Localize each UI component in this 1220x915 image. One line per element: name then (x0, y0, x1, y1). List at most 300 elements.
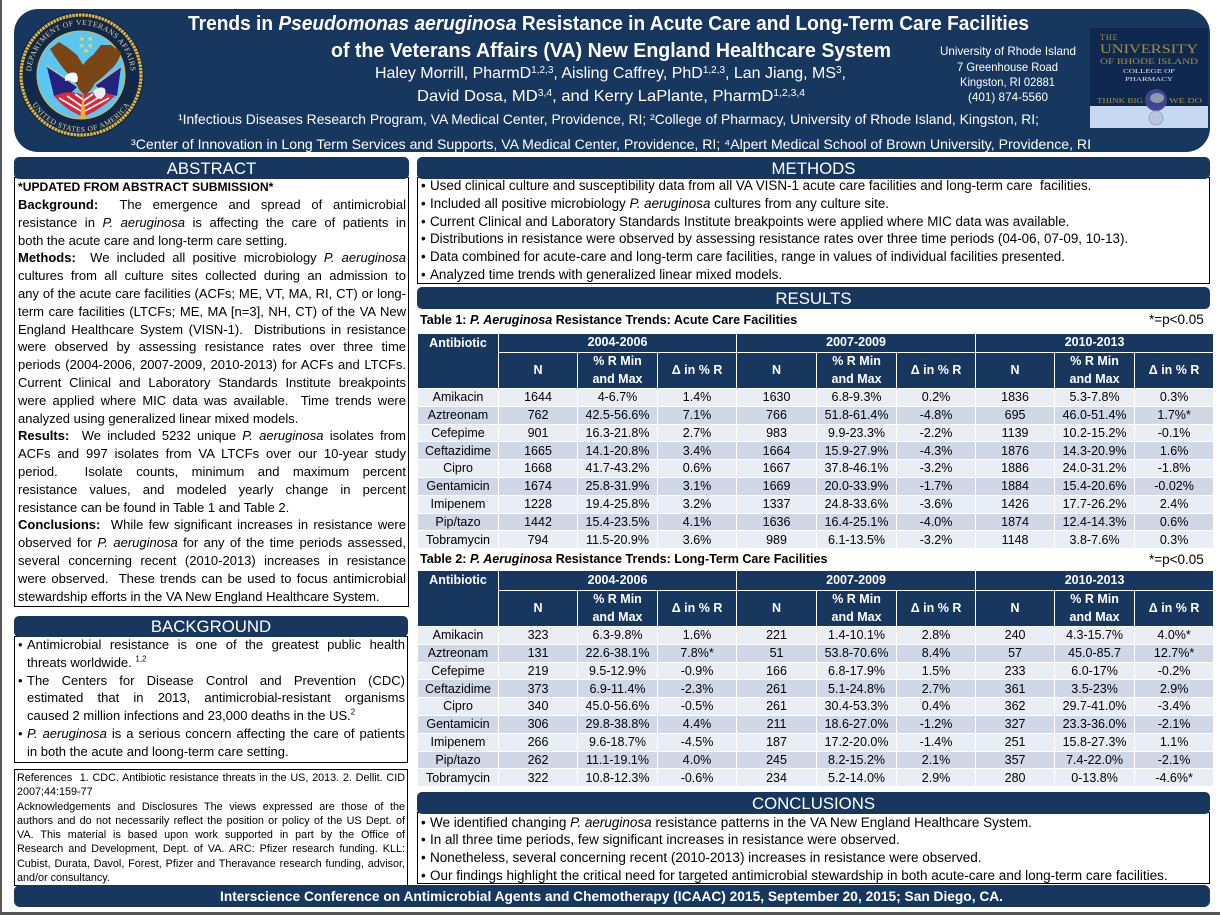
table 2: long-term care facilities: 4.4% (683, 717, 711, 731)
table 2: long-term care facilities: 306 (528, 717, 548, 731)
abstract text: cultures from all culture sites collected during an admission to (18, 268, 406, 283)
table 2: long-term care facilities: 1.6% (683, 628, 711, 642)
panel: abstract (14, 157, 409, 607)
references text: Research and Development, Dept. of VA. ARC: Pfizer research funding. KLL: (17, 843, 405, 855)
table 2: long-term care facilities: 323 (528, 628, 548, 642)
background bullets: in both the acute and loong-term care setting. (27, 744, 289, 759)
abstract text: England Healthcare System (VISN-1). Distributions in resistance (18, 322, 406, 337)
title and authors: 3 (836, 65, 842, 76)
heading: results (417, 287, 1210, 309)
table 1: acute care facilities: 1148 (1002, 533, 1028, 547)
table 2: long-term care facilities: -2.1% (1158, 717, 1190, 731)
table 1: acute care facilities: 1644 (524, 390, 552, 404)
table 1: acute care facilities: Tobramycin (426, 533, 490, 547)
table 1: acute care facilities: -3.6% (920, 497, 952, 511)
table 2: long-term care facilities: 266 (528, 735, 548, 749)
table 1: acute care facilities: 2004-2006 (588, 335, 647, 349)
table 1: acute care facilities: Pip/tazo (435, 515, 481, 529)
table 2: long-term care facilities: 240 (1005, 628, 1025, 642)
methods bullets: Current Clinical and Laboratory Standards Institute breakpoints were applied where MIC data was available. (430, 214, 1069, 229)
table 2: long-term care facilities: 219 (528, 664, 548, 678)
table 1: acute care facilities: 1669 (763, 479, 790, 493)
table 2: long-term care facilities: N (772, 601, 781, 615)
table 1: acute care facilities: 0.3% (1160, 390, 1188, 404)
table 1: acute care facilities: 6.1-13.5% (828, 533, 885, 547)
table 1: acute care facilities: 37.8-46.1% (825, 461, 888, 475)
background bullets: estimated that in 2013, antimicrobial-resistant organisms (27, 690, 405, 705)
table 2: long-term care facilities: and Max (1070, 610, 1120, 624)
heading: conclusions (417, 792, 1210, 814)
table 2: long-term care facilities: Aztreonam (428, 646, 488, 660)
table 1: acute care facilities: 3.8-7.6% (1070, 533, 1120, 547)
table 2: long-term care facilities: 2.9% (1160, 682, 1188, 696)
table 1: acute care facilities: 4-6.7% (598, 390, 637, 404)
heading: conclusions: CONCLUSIONS (752, 794, 875, 813)
table 2: long-term care facilities: Ceftazidime (425, 682, 491, 696)
table 1: acute care facilities: 901 (528, 426, 548, 440)
table 2: long-term care facilities: 2.9% (922, 771, 950, 785)
table 2: long-term care facilities: 221 (766, 628, 787, 642)
title and authors: of the Veterans Affairs (VA) New England Healthcare System (331, 39, 891, 62)
table 1: acute care facilities: 20.0-33.9% (825, 479, 888, 493)
icon: Department of Veterans Affairs seal: DEPARTMENT OF VETERANS AFFAIRS (26, 20, 136, 72)
references text: 2007;44:159-77 (17, 786, 93, 798)
table 1: acute care facilities: 766 (766, 408, 787, 422)
table 2: long-term care facilities: -1.2% (920, 717, 952, 731)
table 2: long-term care facilities: 8.2-15.2% (828, 753, 885, 767)
heading: abstract: ABSTRACT (167, 159, 256, 178)
table 2: long-term care facilities: 373 (528, 682, 548, 696)
background bullets: caused 2 million infections and 23,000 deaths in the US.2 (27, 708, 355, 723)
table 2: long-term care facilities: -0.9% (681, 664, 713, 678)
table 1: acute care facilities: and Max (592, 372, 642, 386)
table 2: long-term care facilities: 57 (1008, 646, 1022, 660)
header banner (14, 9, 1210, 152)
table 1: acute care facilities: 1337 (763, 497, 790, 511)
table 1: acute care facilities: Aztreonam (428, 408, 488, 422)
heading: background (14, 616, 408, 637)
abstract text: resistance in P. aeruginosa is affecting the care of patients in (18, 215, 406, 230)
heading: abstract (14, 157, 409, 179)
abstract text: term care facilities (LTCFs; ME, MA [n=3], NH, CT) of the VA New (18, 304, 406, 319)
title and authors: 1,2,3,4 (773, 88, 805, 99)
title and authors: 7 Greenhouse Road (957, 60, 1058, 74)
title and authors: , Aisling Caffrey, PhD (553, 65, 703, 82)
table 1: acute care facilities: 794 (528, 533, 548, 547)
table 1: acute care facilities: -0.02% (1154, 479, 1194, 493)
table 1: acute care facilities: 42.5-56.6% (586, 408, 649, 422)
icon: Department of Veterans Affairs seal (18, 12, 144, 138)
table 2: long-term care facilities: 7.8%* (680, 646, 714, 660)
methods bullets: Distributions in resistance were observed by assessing resistance rates over three time periods (04-06, 07-09, 10-13). (430, 231, 1128, 246)
title and authors: 1,2,3 (703, 65, 725, 76)
table 1: acute care facilities: 1836 (1001, 390, 1029, 404)
table 1: acute care facilities: 989 (766, 533, 787, 547)
title and authors: David Dosa, MD (417, 88, 533, 105)
table 1: acute care facilities: 2.4% (1160, 497, 1188, 511)
table 2: long-term care facilities: 5.2-14.0% (828, 771, 885, 785)
table 2: long-term care facilities: 1.1% (1160, 735, 1188, 749)
table 2: long-term care facilities: 0.4% (922, 699, 950, 713)
table 1: acute care facilities: -0.1% (1158, 426, 1190, 440)
table 1: acute care facilities: -4.8% (920, 408, 952, 422)
table 2: long-term care facilities: 22.6-38.1% (586, 646, 649, 660)
title and authors: Kingston, RI 02881 (960, 75, 1055, 89)
table 2: long-term care facilities: 8.4% (922, 646, 950, 660)
table 2: long-term care facilities: 51 (770, 646, 783, 660)
methods bullets: Data combined for acute-care and long-term care facilities, range in values of individual facilities presented. (430, 249, 1065, 264)
significance note for table 2: *=p<0.05 (1149, 552, 1204, 567)
abstract text: periods (2004-2006, 2007-2009, 2010-2013) for ACFs and LTCFs. (18, 357, 406, 372)
conclusions body box (417, 812, 1210, 884)
references text: and/or consultancy. (17, 872, 110, 884)
table 1: acute care facilities: 1674 (524, 479, 552, 493)
icon: Department of Veterans Affairs seal: UNITED STATES OF AMERICA (33, 102, 130, 132)
abstract text (18, 197, 406, 604)
table 2: long-term care facilities: 233 (1005, 664, 1025, 678)
table 2: long-term care facilities: 245 (766, 753, 787, 767)
table 2: long-term care facilities: 9.6-18.7% (589, 735, 646, 749)
table 1: acute care facilities: Δ in % R (911, 363, 961, 377)
table 1: acute care facilities: 16.4-25.1% (825, 515, 888, 529)
icon: University of Rhode Island logo (1090, 28, 1208, 128)
panel: methods (417, 157, 1210, 284)
title and authors: , (842, 65, 846, 82)
table 1: acute care facilities: 695 (1005, 408, 1025, 422)
table 1: acute care facilities: 25.8-31.9% (586, 479, 649, 493)
table 2: long-term care facilities: 10.8-12.3% (586, 771, 649, 785)
abstract text: observed for P. aeruginosa for any of the time periods assessed, (18, 535, 406, 550)
table 1: acute care facilities: 14.1-20.8% (586, 444, 649, 458)
table 1: acute care facilities: -2.2% (920, 426, 952, 440)
table 1: acute care facilities: 46.0-51.4% (1063, 408, 1127, 422)
table 1: acute care facilities: 1664 (763, 444, 790, 458)
abstract text: were observed. These trends can be used to focus antimicrobial (18, 571, 406, 586)
table 1 caption: Table 1: P. Aeruginosa Resistance Trends: Acute Care Facilities (420, 313, 797, 327)
table 1: acute care facilities: 24.8-33.6% (825, 497, 888, 511)
abstract text: Conclusions: While few significant increases in resistance were (18, 517, 406, 532)
table 2: long-term care facilities: Imipenem (431, 735, 485, 749)
table 2: long-term care facilities: 15.8-27.3% (1063, 735, 1127, 749)
abstract text: resistance values, and modeled yearly change in percent (18, 482, 406, 497)
table 1: acute care facilities: 24.0-31.2% (1063, 461, 1127, 475)
abstract update notice: *UPDATED FROM ABSTRACT SUBMISSION* (18, 180, 273, 194)
table 2: long-term care facilities: 251 (1005, 735, 1025, 749)
table 1: acute care facilities: 4.1% (683, 515, 711, 529)
icon: Department of Veterans Affairs seal: ★ ★ (79, 42, 93, 50)
table 1: acute care facilities: 0.6% (1160, 515, 1188, 529)
table 2: long-term care facilities: 0-13.8% (1071, 771, 1118, 785)
table 2: long-term care facilities: 1.5% (922, 664, 950, 678)
abstract text: Current Clinical and Laboratory Standards Institute breakpoints (18, 375, 406, 390)
title and authors (131, 12, 1091, 152)
abstract text: any of the acute care facilities (ACFs; ME, VT, MA, RI, CT) or long- (18, 286, 406, 301)
abstract text: were applied where MIC data was available. Time trends were (18, 393, 406, 408)
table 2: long-term care facilities: 6.9-11.4% (589, 682, 646, 696)
table 1: acute care facilities: 3.1% (683, 479, 711, 493)
flags (47, 67, 77, 96)
conclusions bullets: In all three time periods, few significant increases in resistance were observed. (430, 832, 900, 847)
table 1: acute care facilities: 1665 (524, 444, 552, 458)
references text: Acknowledgements and Disclosures The views expressed are those of the (17, 801, 405, 813)
table 1: acute care facilities: 5.3-7.8% (1070, 390, 1120, 404)
table 1: acute care facilities: and Max (1070, 372, 1120, 386)
icon: University of Rhode Island logo: PHARMACY (1125, 77, 1174, 83)
table 2: long-term care facilities: -4.6%* (1155, 771, 1193, 785)
table 1: acute care facilities: N (1011, 363, 1020, 377)
table 2: long-term care facilities: Cipro (443, 699, 473, 713)
title and authors: , Lan Jiang, MS (725, 65, 836, 82)
background bullets: Antimicrobial resistance is one of the greatest public health (27, 637, 405, 652)
table 1: acute care facilities: 1.4% (683, 390, 711, 404)
icon: University of Rhode Island logo: OF RHODE ISLAND (1100, 57, 1198, 66)
table 2: long-term care facilities: 30.4-53.3% (825, 699, 888, 713)
table 2: long-term care facilities: 29.7-41.0% (1063, 699, 1127, 713)
table 1: acute care facilities: -1.8% (1158, 461, 1190, 475)
table 2: long-term care facilities: 6.8-17.9% (828, 664, 885, 678)
table 1: acute care facilities: 1886 (1001, 461, 1029, 475)
table 1: acute care facilities: 11.5-20.9% (586, 533, 649, 547)
table 1: acute care facilities: N (772, 363, 781, 377)
table 1: acute care facilities: Δ in % R (672, 363, 722, 377)
table 1: acute care facilities: N (533, 363, 543, 377)
abstract text: resistance can be found in Table 1 and Table 2. (18, 500, 289, 515)
table 1: acute care facilities: 16.3-21.8% (586, 426, 649, 440)
table 2: long-term care facilities: 362 (1005, 699, 1025, 713)
table 2: long-term care facilities: -4.5% (681, 735, 713, 749)
abstract text: Results: We included 5232 unique P. aeruginosa isolates from (18, 428, 406, 443)
abstract text: were observed by assessing resistance rates over three time (18, 339, 406, 354)
table 2: long-term care facilities: 5.1-24.8% (828, 682, 885, 696)
table 1: acute care facilities: 1884 (1001, 479, 1029, 493)
icon: University of Rhode Island logo: UNIVERSITY (1100, 41, 1199, 56)
stars: ★ ★ (79, 35, 93, 43)
table 2: long-term care facilities: and Max (592, 610, 642, 624)
table 1: acute care facilities: 15.9-27.9% (825, 444, 888, 458)
table 2: long-term care facilities: 261 (766, 682, 787, 696)
title and authors: Haley Morrill, PharmD (375, 65, 531, 82)
references text: authors and do not necessarily reflect the position or policy of the US Dept. of (17, 815, 405, 827)
table 2: long-term care facilities: 187 (766, 735, 787, 749)
icon: University of Rhode Island logo: THINK BIG (1097, 97, 1143, 105)
table 1: acute care facilities: Amikacin (433, 390, 483, 404)
table 1: acute care facilities: 2007-2009 (826, 335, 886, 349)
table 2: long-term care facilities: and Max (832, 610, 882, 624)
heading: methods (417, 157, 1210, 179)
table 1: acute care facilities: -1.7% (920, 479, 952, 493)
references text: VA. This material is based upon work supported in part by the Office of (17, 829, 405, 841)
table 2: long-term care facilities: 261 (766, 699, 787, 713)
abstract text: Background: The emergence and spread of antimicrobial (18, 197, 406, 212)
table 1: acute care facilities: 6.8-9.3% (832, 390, 882, 404)
table 2: long-term care facilities: Pip/tazo (435, 753, 481, 767)
table 2: long-term care facilities: 7.4-22.0% (1066, 753, 1123, 767)
abstract text: Methods: We included all positive microbiology P. aeruginosa (18, 250, 406, 265)
table 2: long-term care facilities: 17.2-20.0% (825, 735, 888, 749)
table 2: long-term care facilities: Antibiotic (429, 573, 487, 587)
footer: conference banner (14, 885, 1210, 907)
table 2: long-term care facilities: 18.6-27.0% (825, 717, 888, 731)
table 1: acute care facilities: 1228 (524, 497, 552, 511)
table 2: long-term care facilities: -3.4% (1158, 699, 1190, 713)
table 2: long-term care facilities: 211 (767, 717, 786, 731)
abstract text: stewardship efforts in the VA New England Healthcare System. (18, 589, 380, 604)
title and authors: (401) 874-5560 (968, 90, 1048, 104)
table 2: long-term care facilities: 45.0-56.6% (586, 699, 649, 713)
references text: References 1. CDC. Antibiotic resistance threats in the US, 2013. 2. Dellit. CID (17, 772, 405, 784)
abstract text: analyzed using generalized linear mixed models. (18, 411, 298, 426)
methods bullets (422, 178, 1128, 282)
table 1: acute care facilities: 9.9-23.3% (828, 426, 885, 440)
table 1: acute care facilities: 15.4-23.5% (586, 515, 649, 529)
table 2: long-term care facilities: 361 (1005, 682, 1025, 696)
heading: methods: METHODS (772, 159, 855, 178)
table 2: long-term care facilities: % R Min (832, 592, 881, 606)
table 1: acute care facilities: 1668 (524, 461, 552, 475)
table 1: acute care facilities: 1442 (524, 515, 552, 529)
title and authors: , and Kerry LaPlante, PharmD (552, 88, 773, 105)
icon: University of Rhode Island logo: COLLEGE OF (1123, 69, 1176, 75)
background body box (14, 636, 408, 763)
table 1: acute care facilities: 10.2-15.2% (1063, 426, 1127, 440)
table 2: long-term care facilities: -2.3% (681, 682, 713, 696)
table 2: long-term care facilities: 327 (1005, 717, 1025, 731)
table 1: acute care facilities: 1874 (1001, 515, 1029, 529)
table 1: acute care facilities: and Max (832, 372, 882, 386)
table 1: acute care facilities: 15.4-20.6% (1063, 479, 1127, 493)
table 2: long-term care facilities: 4.0% (683, 753, 711, 767)
table 1: acute care facilities: 2.7% (683, 426, 711, 440)
table 2: long-term care facilities: 322 (528, 771, 548, 785)
icon: University of Rhode Island logo: THE (1100, 33, 1119, 42)
table 2: long-term care facilities: -1.4% (920, 735, 952, 749)
abstract text: several concerning recent (2010-2013) increases in resistance (18, 553, 406, 568)
title and authors: 3,4 (538, 88, 553, 99)
table 2: long-term care facilities: % R Min (593, 592, 642, 606)
table 2: long-term care facilities (418, 571, 1213, 786)
table 2: long-term care facilities: 4.0%* (1157, 628, 1191, 642)
table 2: long-term care facilities: 2.1% (922, 753, 950, 767)
table 1: acute care facilities: 0.3% (1160, 533, 1188, 547)
table 2: long-term care facilities: Tobramycin (426, 771, 490, 785)
table 1: acute care facilities: 14.3-20.9% (1063, 444, 1127, 458)
conclusions bullets: Nonetheless, several concerning recent (2010-2013) increases in resistance were observed. (430, 850, 982, 865)
eagle (50, 42, 121, 95)
title and authors: Trends in Pseudomonas aeruginosa Resistance in Acute Care and Long-Term Care Facilities (188, 12, 1029, 35)
table 1: acute care facilities: -4.0% (920, 515, 952, 529)
table 2: long-term care facilities: 9.5-12.9% (589, 664, 646, 678)
table 2: long-term care facilities: 12.7%* (1154, 646, 1194, 660)
table 2: long-term care facilities: 2004-2006 (588, 573, 647, 587)
table 2: long-term care facilities: 340 (528, 699, 548, 713)
table 1: acute care facilities: 3.4% (683, 444, 711, 458)
table 2: long-term care facilities: 29.8-38.8% (586, 717, 649, 731)
table 2: long-term care facilities: 4.3-15.7% (1066, 628, 1123, 642)
title and authors: 1,2,3 (531, 65, 554, 76)
abstract text: period. Isolate counts, minimum and maximum percent (18, 464, 406, 479)
table 2: long-term care facilities: 6.0-17% (1071, 664, 1118, 678)
icon: Department of Veterans Affairs seal: ★ (83, 47, 89, 55)
table 2: long-term care facilities: N (1011, 601, 1020, 615)
table 2: long-term care facilities: 234 (766, 771, 787, 785)
methods body box (417, 177, 1210, 284)
table 1: acute care facilities: 0.2% (922, 390, 950, 404)
table 2: long-term care facilities: -0.6% (681, 771, 713, 785)
table 1: acute care facilities: -4.3% (920, 444, 952, 458)
table 1: acute care facilities: 983 (766, 426, 787, 440)
heading: background: BACKGROUND (151, 617, 271, 636)
title and authors: ¹Infectious Diseases Research Program, VA Medical Center, Providence, RI; ²College of Pharmacy, University of Rhode Island, Kingston, RI; (178, 111, 1039, 127)
table 1: acute care facilities: 1.7%* (1157, 408, 1191, 422)
table 2: long-term care facilities: Δ in % R (672, 601, 722, 615)
table 1: acute care facilities: Gentamicin (426, 479, 490, 493)
table 1: acute care facilities: 3.2% (683, 497, 711, 511)
abstract text: ACFs and 997 isolates from VA LTCFs over our 10-year study (18, 446, 406, 461)
table 1: acute care facilities: 19.4-25.8% (586, 497, 649, 511)
heading: results: RESULTS (775, 289, 852, 308)
references text (17, 772, 405, 884)
table 1: acute care facilities: Cefepime (431, 426, 485, 440)
icon: University of Rhode Island logo: WE DO (1169, 97, 1202, 105)
table 2: long-term care facilities: 166 (766, 664, 787, 678)
methods bullets: Analyzed time trends with generalized linear mixed models. (430, 267, 782, 282)
table 1: acute care facilities: 762 (528, 408, 548, 422)
table 1: acute care facilities: 41.7-43.2% (586, 461, 649, 475)
table 2: long-term care facilities: 2.8% (922, 628, 950, 642)
significance note for table 1: *=p<0.05 (1149, 312, 1204, 327)
table 1: acute care facilities: 1876 (1001, 444, 1029, 458)
table 2: long-term care facilities: 2010-2013 (1065, 573, 1124, 587)
table 1: acute care facilities: 51.8-61.4% (825, 408, 888, 422)
table 2: long-term care facilities: 262 (528, 753, 548, 767)
table 1: acute care facilities: -3.2% (920, 461, 952, 475)
table 2: long-term care facilities: Δ in % R (1149, 601, 1199, 615)
table 2 caption: Table 2: P. Aeruginosa Resistance Trends: Long-Term Care Facilities (420, 552, 827, 566)
table 2: long-term care facilities: Amikacin (433, 628, 483, 642)
table 2: long-term care facilities: 2007-2009 (826, 573, 886, 587)
table 1: acute care facilities: 1630 (763, 390, 790, 404)
table 1: acute care facilities (418, 334, 1213, 548)
table 1: acute care facilities: 1667 (763, 461, 790, 475)
table 2: long-term care facilities: 53.8-70.6% (825, 646, 888, 660)
table 2: long-term care facilities: 11.1-19.1% (586, 753, 649, 767)
abstract text: both the acute care and long-term care setting. (18, 233, 288, 248)
table 1: acute care facilities: 7.1% (683, 408, 711, 422)
table 1: acute care facilities: 1139 (1002, 426, 1028, 440)
table 1: acute care facilities: -3.2% (920, 533, 952, 547)
table 1: acute care facilities: 1.6% (1160, 444, 1188, 458)
table 1: acute care facilities: 2010-2013 (1065, 335, 1124, 349)
table 1: acute care facilities: Ceftazidime (425, 444, 491, 458)
table 1: acute care facilities: 3.6% (683, 533, 711, 547)
table 1: acute care facilities: 1426 (1001, 497, 1029, 511)
table 2: long-term care facilities: Gentamicin (426, 717, 490, 731)
abstract body box (14, 177, 409, 607)
background bullets: P. aeruginosa is a serious concern affecting the care of patients (27, 726, 405, 741)
table 2: long-term care facilities: 131 (528, 646, 548, 660)
table 1: acute care facilities: 12.4-14.3% (1063, 515, 1127, 529)
table 2: long-term care facilities: % R Min (1070, 592, 1119, 606)
background bullets: threats worldwide. 1,2 (27, 654, 147, 670)
table 2: long-term care facilities: Δ in % R (911, 601, 961, 615)
table 2: long-term care facilities: 280 (1005, 771, 1025, 785)
table 1: acute care facilities: 17.7-26.2% (1063, 497, 1127, 511)
title and authors: ³Center of Innovation in Long Term Services and Supports, VA Medical Center, Providence, RI; ⁴Alpert Medical School of Brown University, Providence, RI (131, 136, 1091, 152)
table 2: long-term care facilities: 1.4-10.1% (828, 628, 885, 642)
table 1: acute care facilities: Δ in % R (1149, 363, 1199, 377)
references text: Cubist, Durata, Davol, Forest, Pfizer and Theravance research funding, advisor, (17, 858, 405, 870)
table 1: acute care facilities: % R Min (1070, 354, 1119, 368)
